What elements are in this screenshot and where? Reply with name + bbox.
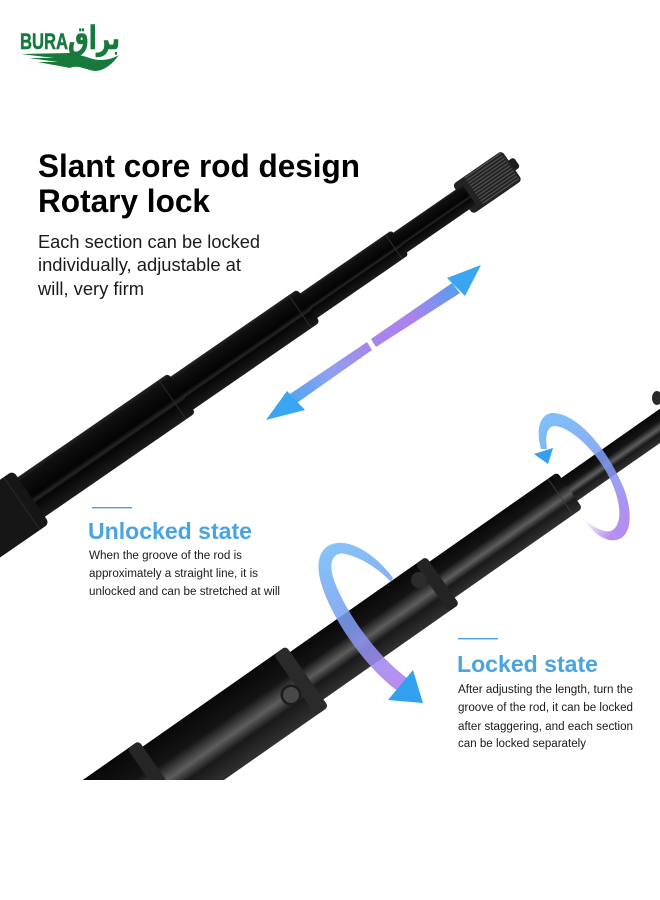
callout: unlocked state (88, 507, 280, 598)
rod tip (505, 157, 520, 173)
locked rule (458, 638, 498, 639)
callout: locked state (457, 638, 633, 750)
lower collar C (417, 558, 458, 610)
arrow shaft upper (371, 283, 460, 347)
title: Slant core rod design (38, 148, 360, 184)
lower section E (82, 742, 149, 780)
description: Each section can be locked (38, 232, 260, 252)
lower collar E (128, 742, 166, 780)
arrow upper head (447, 265, 481, 296)
logo wordmark: BURA (20, 29, 68, 54)
locked text: can be locked separately (458, 738, 586, 750)
unlocked text: unlocked and can be stretched at will (89, 586, 280, 598)
description: will, very firm (37, 279, 144, 299)
rod collar 2 edge (385, 234, 403, 260)
locked text: groove of the rod, it can be locked (458, 702, 633, 714)
rotation arrow: upper ring (534, 413, 630, 540)
lower section D (142, 648, 327, 780)
locked text (458, 684, 633, 750)
unlocked text (89, 550, 280, 598)
lower section B (430, 474, 581, 598)
lower rod tip (652, 391, 660, 405)
upper ring band (539, 413, 630, 540)
rotation arrow: lower ring (318, 543, 423, 703)
logo: BURA brand mark (20, 19, 120, 71)
locked text: After adjusting the length, turn the (458, 684, 633, 696)
rod section 2 (296, 230, 409, 321)
lower collar B edge (547, 478, 573, 515)
logo wing (21, 53, 119, 71)
rod collar 3 edge (288, 295, 312, 328)
lower ring head (388, 670, 423, 703)
description (37, 232, 260, 299)
locked text: after staggering, and each section (458, 721, 633, 733)
upper ring head (534, 448, 553, 464)
knob (452, 151, 522, 214)
lower collar D (276, 648, 327, 714)
arrow lower head (266, 391, 305, 420)
rod section 4 (11, 373, 196, 521)
lower ring band (318, 543, 410, 692)
rod: upper telescopic rod (0, 136, 535, 579)
rod: lower telescopic rod (82, 391, 660, 780)
arrow shaft lower (287, 342, 372, 405)
lower rod body (82, 408, 660, 780)
rod collar 5 edge (3, 477, 40, 530)
upper ring tail (583, 518, 616, 540)
rod collar 4 edge (158, 380, 186, 420)
unlocked text: approximately a straight line, it is (89, 568, 258, 580)
rod section 5 (0, 471, 49, 579)
description: individually, adjustable at (38, 255, 241, 275)
arrow: stretch double arrow (266, 265, 481, 420)
lower rod pin hole small (411, 572, 427, 588)
unlocked text: When the groove of the rod is (89, 550, 242, 562)
locked heading: Locked state (457, 651, 598, 677)
lower section A (561, 408, 660, 501)
unlocked rule (92, 507, 132, 508)
knob knurling (483, 165, 502, 193)
rod section 3 (166, 289, 320, 412)
subtitle: Rotary lock (38, 183, 210, 219)
lower rod pin hole large (280, 684, 302, 706)
unlocked heading: Unlocked state (88, 518, 252, 544)
rod section 1 (388, 185, 476, 256)
logo arabic wordmark: براق (68, 19, 120, 57)
lower section C (290, 558, 458, 700)
